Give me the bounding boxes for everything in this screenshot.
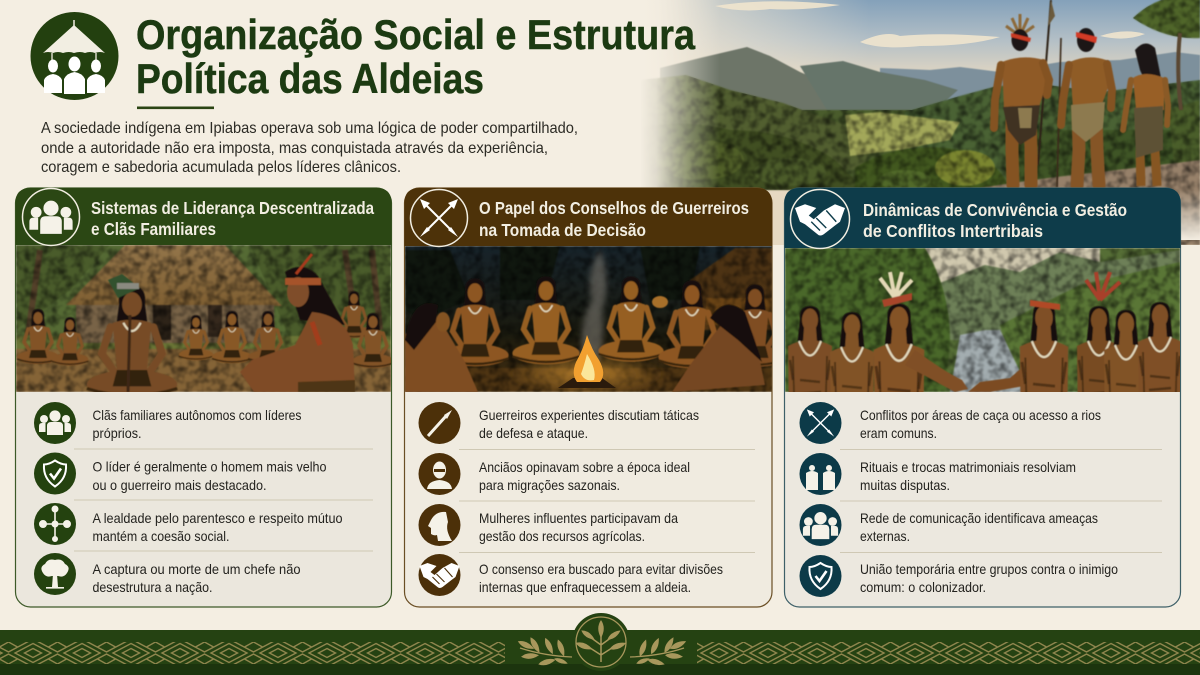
item: tree: desestrutura a nação. <box>92 579 212 595</box>
item: spear <box>418 402 699 444</box>
item: handshake: O consenso era buscado para evitar divisões <box>479 561 723 577</box>
panel heading: O Papel dos Conselhos de Guerreiros <box>479 198 749 218</box>
item: crossed arrows <box>800 402 1101 444</box>
panel heading <box>479 198 749 240</box>
panel heading: e Clãs Familiares <box>91 219 216 239</box>
intro text: coragem e sabedoria acumulada pelos líderes clânicos. <box>41 159 401 176</box>
title: Organização Social e Estrutura <box>136 11 696 58</box>
item: tree: A captura ou morte de um chefe não <box>92 561 301 577</box>
item: kinship network <box>34 503 343 545</box>
item: handshake: internas que enfraquecessem a aldeia. <box>479 579 691 595</box>
item: communication network <box>800 504 1098 546</box>
item: autonomous clans: Clãs familiares autônomos com líderes <box>92 407 302 423</box>
item: leader: O líder é geralmente o homem mais velho <box>92 458 327 474</box>
item: shield <box>800 555 1118 597</box>
header icon: crossed spears <box>410 190 468 246</box>
intro text: A sociedade indígena em Ipiabas operava sob uma lógica de poder compartilhado, <box>41 120 578 137</box>
item: autonomous clans: próprios. <box>92 425 142 441</box>
panel heading <box>863 200 1127 241</box>
item: spear: Guerreiros experientes discutiam táticas <box>479 407 699 423</box>
footer band <box>0 613 1200 675</box>
item: two persons <box>800 453 1076 495</box>
item: elder <box>418 453 690 495</box>
item: crossed arrows: Conflitos por áreas de caça ou acesso a rios <box>860 407 1101 423</box>
title: Política das Aldeias <box>136 55 484 102</box>
intro text: onde a autoridade não era imposta, mas conquistada através da experiência, <box>41 140 548 157</box>
panel: warrior councils <box>404 188 786 607</box>
item: crossed arrows: eram comuns. <box>860 425 937 441</box>
item: autonomous clans <box>34 402 302 444</box>
scene: handshake between groups <box>785 248 1180 392</box>
item: kinship network: mantém a coesão social. <box>92 528 230 544</box>
panel header <box>784 188 1180 248</box>
header icon: people <box>22 188 80 246</box>
item: kinship network: A lealdade pelo parentesco e respeito mútuo <box>92 510 343 526</box>
item: woman profile: Mulheres influentes participavam da <box>479 510 678 526</box>
panel heading <box>91 198 374 239</box>
hero landscape with warriors <box>640 0 1200 245</box>
scene: council around fire <box>405 246 786 396</box>
panel heading: Dinâmicas de Convivência e Gestão <box>863 200 1127 220</box>
panel heading: de Conflitos Intertribais <box>863 221 1043 241</box>
header icon: handshake <box>790 190 850 248</box>
item: two persons: Rituais e trocas matrimoniais resolviam <box>860 459 1076 475</box>
scene: village council around hut <box>16 245 394 399</box>
item: shield: União temporária entre grupos contra o inimigo <box>860 561 1118 577</box>
item: elder: para migrações sazonais. <box>479 477 620 493</box>
intro text <box>41 120 578 176</box>
item: spear: de defesa e ataque. <box>479 425 588 441</box>
footer emblem: plant and laurels <box>517 613 687 671</box>
item: tree <box>34 553 301 595</box>
item: shield: comum: o colonizador. <box>860 579 986 595</box>
panel heading: Sistemas de Liderança Descentralizada <box>91 198 374 218</box>
item: woman profile <box>418 504 678 546</box>
item: woman profile: gestão dos recursos agrícolas. <box>479 528 645 544</box>
item: leader: ou o guerreiro mais destacado. <box>92 477 266 493</box>
item: communication network: externas. <box>860 528 910 544</box>
panel header <box>16 188 392 245</box>
item: leader <box>34 452 327 494</box>
item: handshake <box>418 554 723 596</box>
panel header <box>404 188 772 246</box>
panel: intertribal dynamics <box>784 188 1182 607</box>
item: elder: Anciãos opinavam sobre a época ideal <box>479 459 690 475</box>
title <box>136 11 696 102</box>
panel heading: na Tomada de Decisão <box>479 220 646 240</box>
panel: leadership <box>16 188 394 607</box>
item: communication network: Rede de comunicação identificava ameaças <box>860 510 1098 526</box>
item: two persons: muitas disputas. <box>860 477 950 493</box>
logo: hut over three people <box>30 12 118 100</box>
